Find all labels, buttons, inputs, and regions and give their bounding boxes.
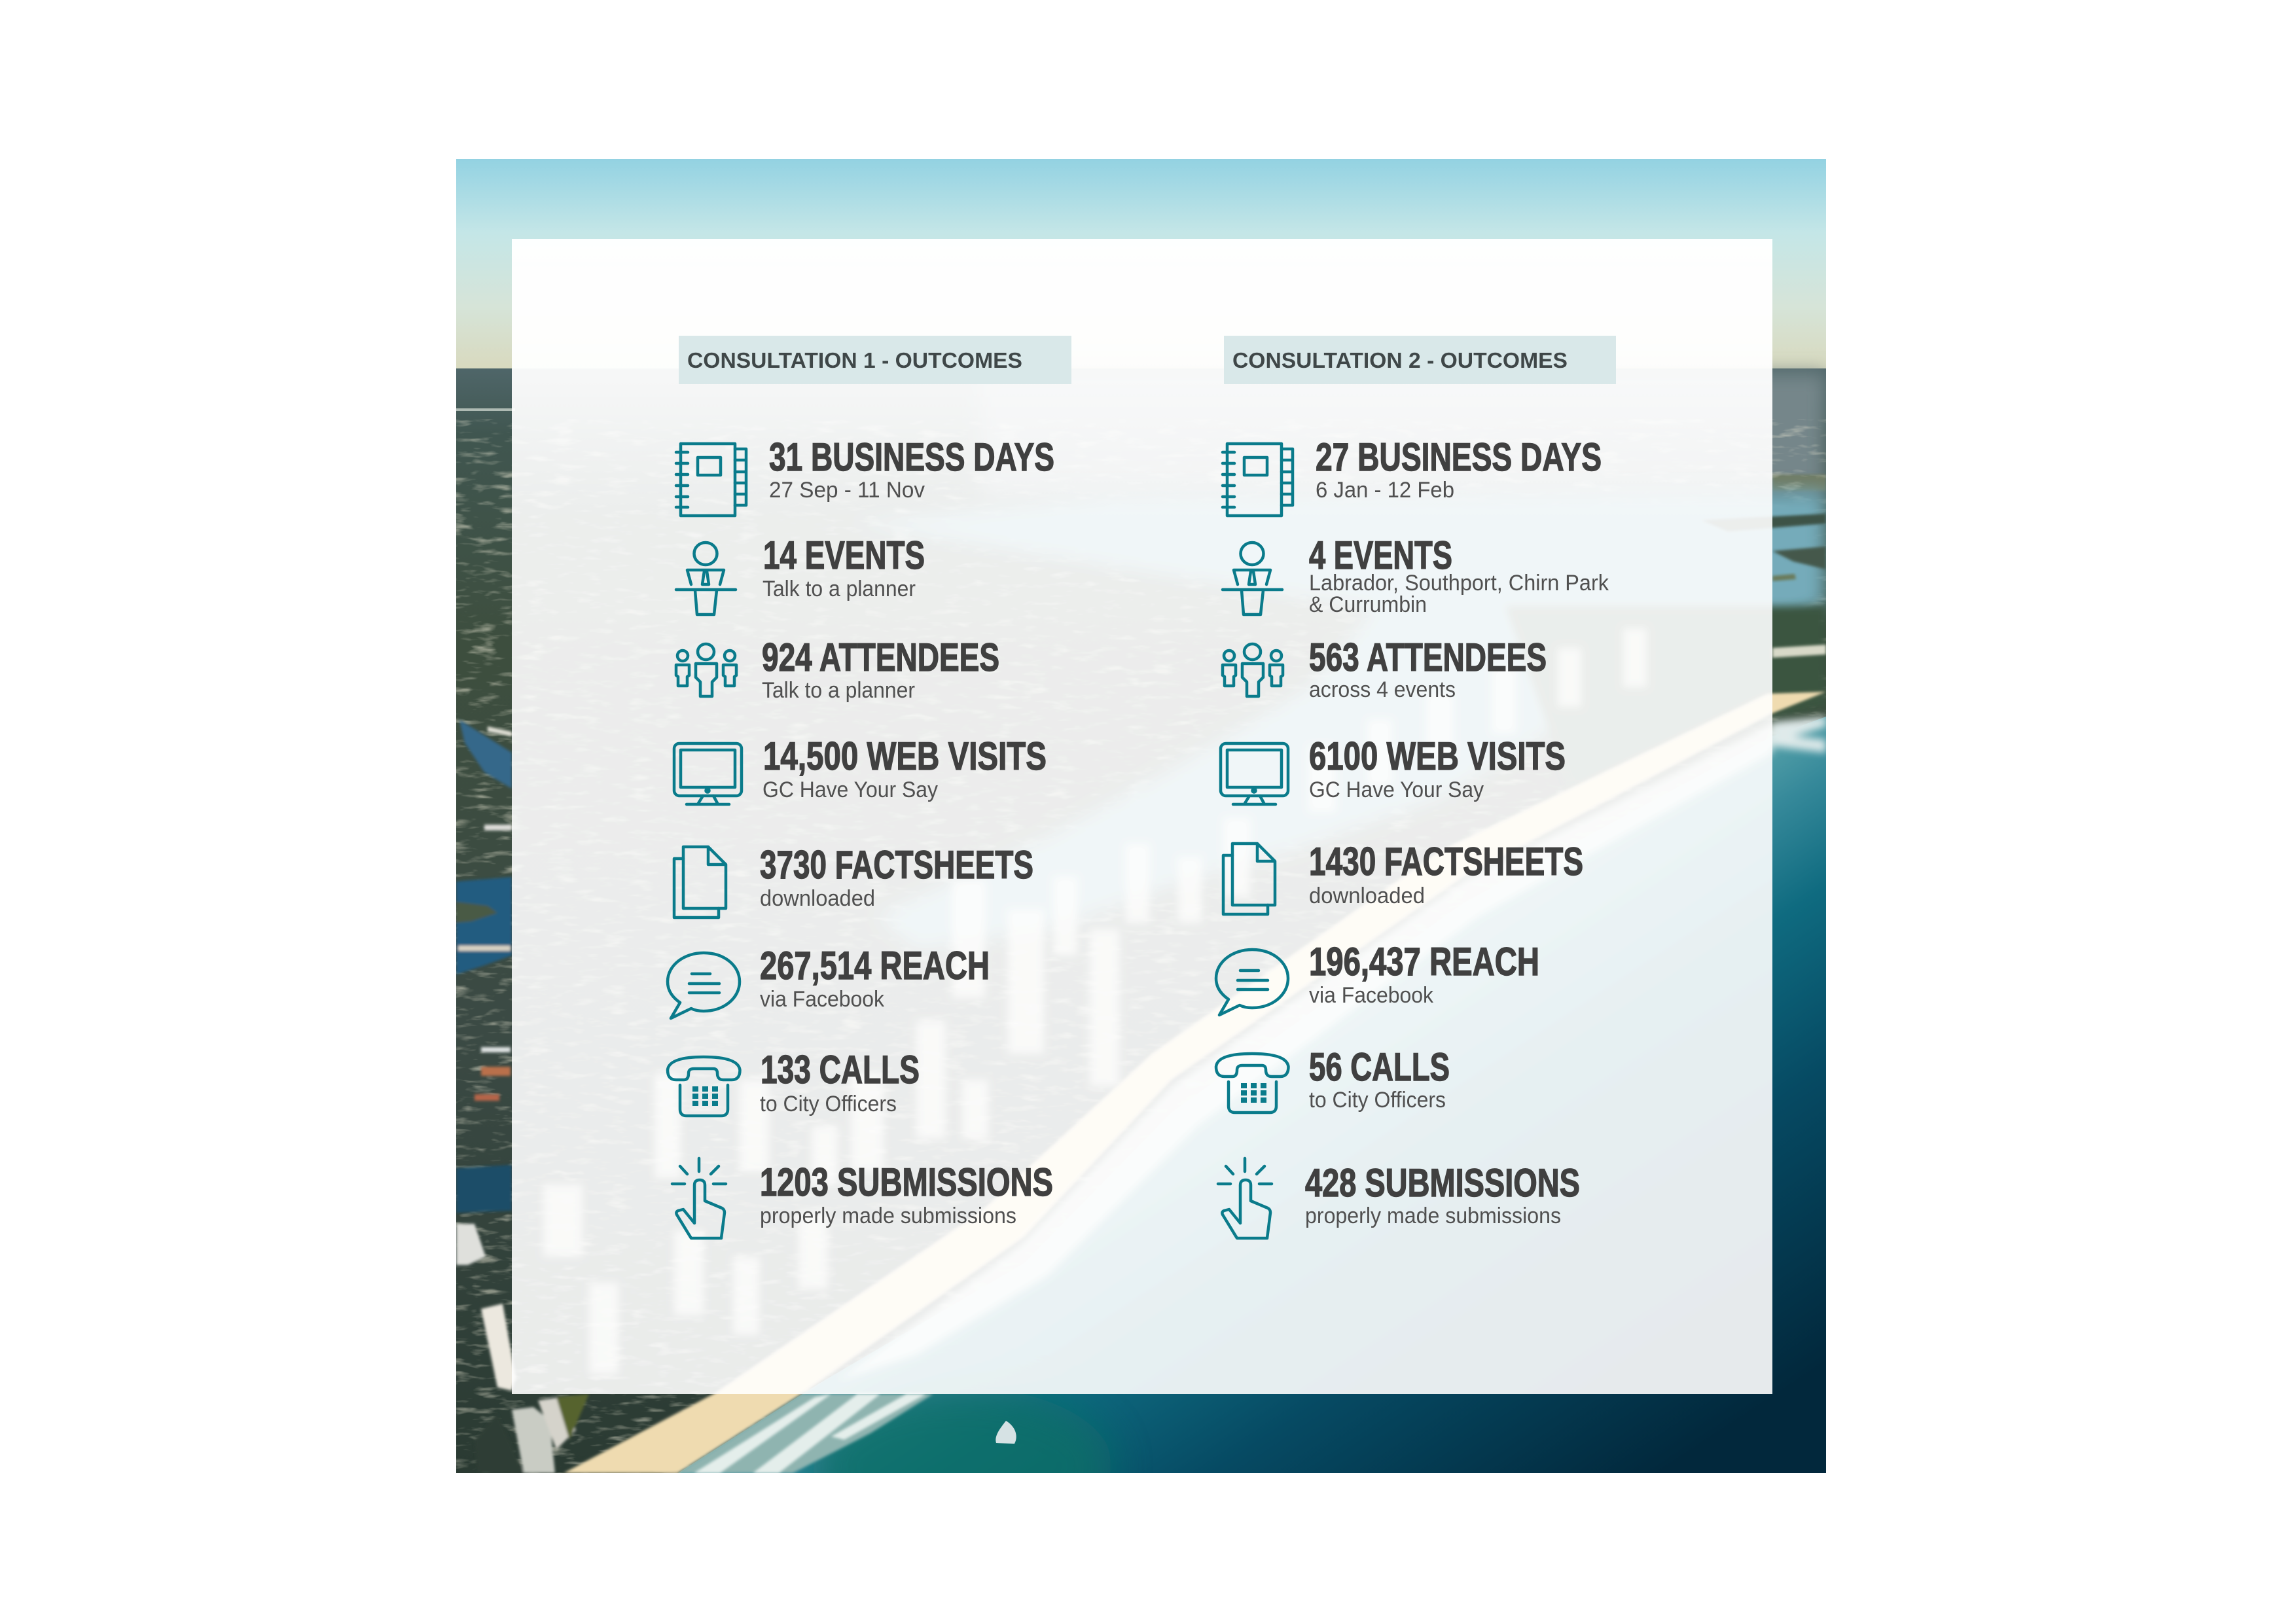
row: reach [668, 944, 990, 1018]
icon: pointing hand [672, 1158, 726, 1238]
icon: person at a table [1223, 543, 1282, 615]
icon: telephone [1216, 1054, 1288, 1113]
subtext: to City Officers [760, 1092, 897, 1116]
row: events [1223, 533, 1609, 617]
headline: 267,514 REACH [760, 944, 990, 988]
subtext: downloaded [760, 886, 875, 911]
subtext: to City Officers [1309, 1088, 1446, 1113]
subtext: 6 Jan - 12 Feb [1316, 478, 1454, 503]
subtext: Labrador, Southport, Chirn Park [1309, 571, 1609, 596]
row: web visits [674, 734, 1047, 804]
icon: pointing hand [1218, 1158, 1272, 1238]
towers seen through the panel [543, 628, 1647, 1374]
icon: speech bubble [668, 953, 740, 1018]
icon: documents [1223, 844, 1275, 914]
heading bar: consultation 2: CONSULTATION 2 - OUTCOMES [1232, 348, 1568, 372]
left strip waterways and suburbs [456, 720, 589, 1473]
subtext: via Facebook [760, 987, 885, 1012]
headline: 6100 WEB VISITS [1309, 734, 1566, 778]
icon: monitor [1221, 743, 1288, 804]
icon: notebook [1223, 444, 1293, 516]
headline: 428 SUBMISSIONS [1305, 1161, 1580, 1205]
heading bar: consultation 1 [679, 336, 1071, 384]
subtext: downloaded [1309, 883, 1425, 908]
row: factsheets [1223, 840, 1583, 914]
row: calls [668, 1048, 920, 1116]
headline: 924 ATTENDEES [762, 635, 999, 679]
row: submissions [672, 1158, 1053, 1238]
headline: 133 CALLS [761, 1048, 920, 1092]
icon: three people [1223, 644, 1283, 696]
headline: 196,437 REACH [1309, 940, 1539, 984]
row: reach [1216, 940, 1539, 1015]
column: consultation 1 [668, 336, 1071, 1238]
row: attendees [1223, 635, 1547, 702]
row: events [676, 533, 925, 615]
icon: notebook [676, 444, 746, 516]
subtext: Talk to a planner [762, 678, 915, 703]
headline: 56 CALLS [1309, 1045, 1450, 1089]
background photo: aerial view of the coast [456, 159, 1826, 1544]
row: factsheets [674, 843, 1033, 918]
heading bar: consultation 1: CONSULTATION 1 - OUTCOMES [687, 348, 1022, 372]
headline: 14,500 WEB VISITS [763, 734, 1047, 778]
subtext: properly made submissions [760, 1204, 1016, 1228]
icon: speech bubble [1216, 950, 1288, 1015]
headline: 27 BUSINESS DAYS [1316, 435, 1602, 479]
translucent white panel [512, 239, 1772, 1394]
icon: documents [674, 847, 726, 918]
headline: 31 BUSINESS DAYS [769, 435, 1054, 479]
row: business days [1223, 435, 1602, 516]
row: business days [676, 435, 1054, 516]
row: web visits [1221, 734, 1566, 804]
headline: 3730 FACTSHEETS [760, 843, 1033, 887]
headline: 14 EVENTS [763, 533, 925, 577]
subtext: 27 Sep - 11 Nov [769, 478, 925, 503]
headline: 4 EVENTS [1309, 533, 1452, 577]
subtext: GC Have Your Say [1309, 777, 1484, 802]
icon: three people [676, 644, 736, 696]
row: attendees [676, 635, 999, 703]
subtext: via Facebook [1309, 983, 1434, 1008]
headline: 563 ATTENDEES [1309, 635, 1547, 679]
subtext: properly made submissions [1305, 1204, 1561, 1228]
subtext: Talk to a planner [762, 577, 916, 601]
headline: 1430 FACTSHEETS [1309, 840, 1583, 883]
icon: monitor [674, 743, 742, 804]
headline: 1203 SUBMISSIONS [760, 1160, 1053, 1204]
column: consultation 2 [1216, 336, 1616, 1238]
icon: telephone [668, 1057, 740, 1116]
row: calls [1216, 1045, 1450, 1113]
subtext second line: & Currumbin [1309, 592, 1427, 617]
subtext: across 4 events [1309, 677, 1456, 702]
heading bar: consultation 2 [1224, 336, 1616, 384]
row: submissions [1218, 1158, 1580, 1238]
icon: person at a table [676, 543, 736, 615]
subtext: GC Have Your Say [762, 777, 938, 802]
